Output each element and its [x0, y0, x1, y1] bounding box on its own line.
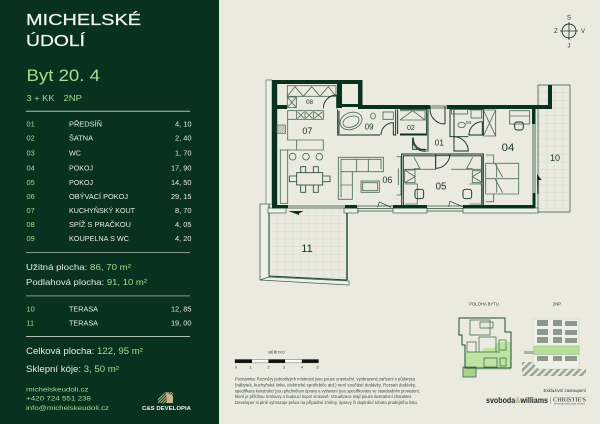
scale bar: 3 — [283, 366, 285, 370]
room 02 wardrobe: 02 — [407, 125, 415, 132]
room 04 bedroom: 04 — [502, 142, 514, 154]
table: interior rooms: KUCHYŇSKÝ KOUT — [69, 206, 135, 215]
mini elevation: floor 2NP: 2NP — [553, 302, 561, 306]
table: interior rooms: 1, 70 — [175, 148, 192, 158]
disclaimer note: specifikace konstrukcí jsou předmětem úpravy a vybavení jsou specifikovány ve standardním provedení, — [235, 388, 420, 393]
disclaimer note: Poznámka: Rozměry jednotlivých místností jsou pouze orientační, vyobrazené zařízení v půdorysu — [235, 376, 415, 382]
table: interior rooms: WC — [69, 148, 82, 158]
exclusive representation logos — [486, 388, 587, 406]
outer thin parapet — [266, 80, 272, 204]
left half details — [277, 86, 425, 215]
table: interior rooms: ŠATNA — [69, 134, 93, 142]
dining table — [289, 167, 330, 192]
structural walls — [272, 80, 552, 208]
room 08 pantry — [287, 86, 337, 108]
contact details: info@michelskeudoli.cz — [26, 405, 110, 412]
disclaimer note — [235, 376, 420, 405]
apartment type and floor: 3 + KK — [26, 94, 55, 103]
room 08 pantry: 08 — [306, 99, 314, 106]
contact details — [26, 386, 110, 412]
table: interior rooms: KOUPELNA S WC — [69, 234, 130, 243]
table: interior rooms: 09 — [26, 234, 35, 243]
right half details — [400, 107, 542, 207]
title: Michelské údolí — [26, 12, 141, 50]
table: terraces: 19, 00 — [171, 318, 192, 328]
terrace 10 — [538, 85, 570, 212]
contact details: michelskeudoli.cz — [26, 386, 89, 394]
table: interior rooms: 06 — [26, 192, 35, 201]
exclusive representation logos: CHRISTIE'S — [553, 398, 586, 404]
room 03 WC — [450, 109, 496, 137]
terrace 11: 11 — [301, 243, 313, 255]
room 05 bedroom: 05 — [436, 181, 446, 192]
scale bar: 0 — [235, 366, 237, 370]
icon: compass: S — [567, 16, 571, 22]
table: interior rooms — [26, 119, 192, 243]
icon: compass: V — [581, 29, 585, 35]
mini elevation: floor 2NP — [522, 302, 586, 376]
usable and floor area — [26, 262, 147, 287]
windows — [288, 106, 535, 211]
logo: C&S Developia — [142, 392, 191, 412]
usable and floor area: Užitná plocha: 86, 70 m² — [26, 262, 131, 272]
table: interior rooms: 05 — [26, 178, 35, 187]
table: interior rooms: 01 — [26, 119, 35, 128]
icon: compass: Z — [554, 29, 558, 35]
icon: compass: J — [568, 44, 570, 50]
apartment type and floor: 2NP — [64, 94, 82, 103]
table: interior rooms: 08 — [26, 220, 35, 229]
room 07 kitchen — [277, 111, 323, 203]
table: terraces: 12, 85 — [171, 304, 192, 314]
table: interior rooms: 04 — [26, 164, 35, 172]
table: interior rooms: 4, 05 — [175, 220, 192, 229]
disclaimer note: které je přílohou Smlouvy o budoucí kupní smlouvě. Vizualizace mají pouze ilustrativní charakter. — [235, 394, 412, 399]
terrace 11 — [260, 204, 349, 285]
heading: apartment number: Byt 20. 4 — [26, 66, 100, 85]
scale bar: 4 — [301, 366, 303, 370]
table: interior rooms: 4, 20 — [175, 234, 192, 243]
logo: C&S Developia: C&S DEVELOPIA — [142, 406, 191, 412]
exclusive representation logos: INTERNATIONAL REAL ESTATE — [554, 402, 586, 406]
table: interior rooms: 07 — [26, 206, 35, 215]
room 01 hallway — [430, 107, 468, 152]
entrance arrow, terrace 11 — [288, 211, 304, 215]
table: interior rooms: OBÝVACÍ POKOJ — [69, 192, 128, 201]
room 09 bathroom — [337, 109, 398, 135]
title: Michelské údolí: MICHELSKÉ — [26, 12, 141, 29]
table: interior rooms: 4, 10 — [175, 119, 192, 128]
exclusive representation logos: svoboda&williams — [486, 396, 548, 405]
table: terraces: TERASA — [69, 318, 98, 328]
sofa — [338, 157, 401, 199]
mini map: apartment location: POLOHA BYTU — [469, 302, 499, 306]
table: terraces: 10 — [26, 304, 35, 314]
table: interior rooms: 8, 70 — [175, 206, 192, 215]
room 09 bathroom: 09 — [365, 122, 374, 131]
table: terraces — [26, 304, 192, 328]
room 05 bedroom — [402, 154, 483, 207]
contact details: +420 724 551 238 — [26, 396, 91, 402]
icon: compass — [554, 16, 585, 50]
scale bar: 2 — [267, 366, 270, 370]
table: interior rooms: 29, 15 — [171, 192, 192, 201]
apartment type and floor — [26, 94, 82, 103]
table: interior rooms: POKOJ — [69, 178, 93, 187]
table: interior rooms: POKOJ — [69, 164, 93, 172]
table: interior rooms: 14, 50 — [171, 178, 192, 187]
table: interior rooms: PŘEDSÍŇ — [69, 119, 102, 128]
scale bar — [235, 350, 319, 370]
mini map: apartment location — [459, 302, 511, 377]
disclaimer note: (nábytek, kuchyňská linka, elektrické spotřebiče atd.) není součástí dodávky. Rozsah dodávky, — [235, 382, 416, 388]
table: terraces: TERASA — [69, 304, 98, 314]
room 03 WC: 03 — [466, 120, 472, 125]
title: Michelské údolí: ÚDOLÍ — [26, 33, 86, 50]
table: interior rooms: SPÍŽ S PRAČKOU — [69, 220, 131, 229]
sofa: 06 — [382, 175, 392, 185]
scale bar: 5 — [316, 366, 319, 370]
scale bar: MĚŘÍTKO — [268, 350, 285, 354]
total area and cellar: Sklepní kóje: 3, 50 m² — [26, 364, 119, 374]
arrow, terrace 10 — [537, 174, 542, 194]
window sills — [268, 208, 538, 213]
room 04 bedroom — [486, 111, 530, 202]
table: interior rooms: 17, 90 — [171, 164, 192, 172]
terrace 10: 10 — [550, 153, 560, 163]
disclaimer note: Developer si plně vyhrazuje právo na případné změny, úpravy či doplnění tohoto prodejního listu. — [235, 400, 418, 405]
table: interior rooms: 03 — [26, 148, 35, 158]
usable and floor area: Podlahová plocha: 91, 10 m² — [26, 277, 147, 287]
room 01 hallway: 01 — [435, 137, 444, 147]
room 07 kitchen: 07 — [302, 126, 312, 136]
scale bar: 1 — [249, 366, 252, 370]
floor plan — [266, 80, 552, 215]
exclusive representation logos: Exkluzivní zastoupení — [544, 388, 587, 393]
panel: apartment information — [0, 0, 219, 424]
total area and cellar: Celková plocha: 122, 95 m² — [26, 346, 143, 356]
total area and cellar — [26, 346, 143, 374]
table: interior rooms: 2, 40 — [175, 134, 192, 142]
table: terraces: 11 — [26, 318, 34, 328]
outer door — [378, 202, 391, 207]
table: interior rooms: 02 — [26, 134, 35, 142]
room 02 wardrobe — [400, 109, 428, 152]
